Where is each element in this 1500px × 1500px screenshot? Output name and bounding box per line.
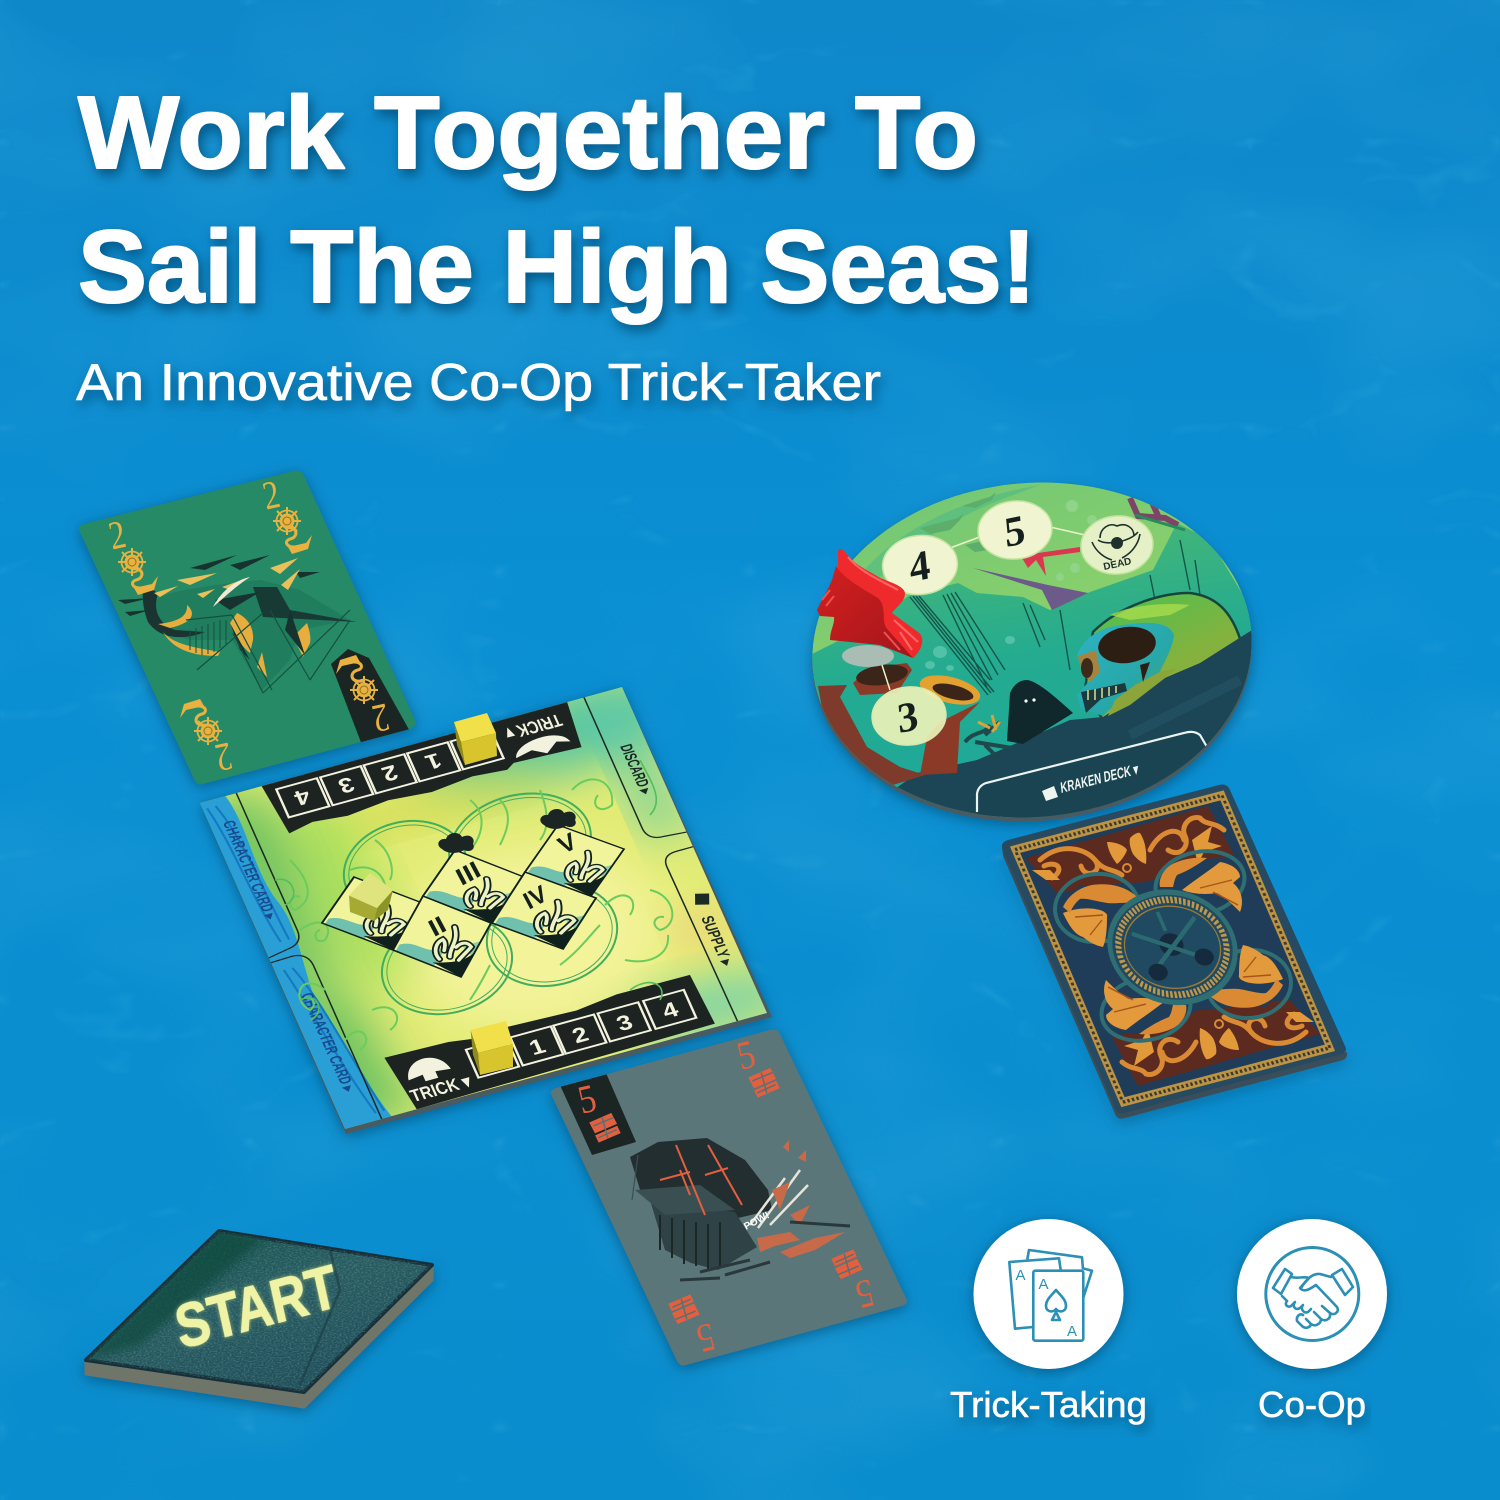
board region outlines bbox=[200, 687, 767, 1129]
board kraken grid: III bbox=[452, 856, 485, 891]
ship illustration bbox=[118, 555, 357, 693]
bottom trick strip: 1 bbox=[525, 1034, 549, 1060]
bottom trick strip: 4 bbox=[658, 998, 683, 1024]
top trick strip: 1 bbox=[421, 748, 445, 774]
number 5 and suit marks: 5 bbox=[693, 1314, 719, 1361]
bottom trick strip bbox=[384, 973, 716, 1112]
number 5 and suit marks bbox=[574, 1032, 878, 1361]
title bbox=[78, 75, 1036, 324]
side labels: CHARACTER CARD ▸ bbox=[297, 991, 359, 1095]
pots bbox=[818, 661, 983, 800]
title: Work Together To bbox=[78, 75, 978, 190]
coral bbox=[965, 715, 1012, 755]
token dark floor bbox=[898, 630, 1252, 818]
icon: playing card glyphs: A bbox=[1038, 1276, 1049, 1293]
yellow cube: top strip bbox=[454, 713, 497, 765]
shipwreck illustration: POW! bbox=[742, 1210, 771, 1233]
icon: co-op circle bbox=[1237, 1219, 1387, 1369]
bottom trick strip: 2 bbox=[569, 1022, 592, 1048]
card banner bbox=[331, 649, 412, 745]
red meeple bbox=[817, 549, 922, 667]
number 2 and suit marks: 2 bbox=[105, 512, 130, 558]
round kraken token bbox=[798, 468, 1270, 840]
number 2 and suit marks: 2 bbox=[211, 734, 236, 780]
sharks and bubbles bbox=[920, 492, 1097, 581]
bubbles lower left bbox=[925, 636, 1015, 671]
number spaces on the track: 5 bbox=[1002, 507, 1027, 557]
start token bbox=[80, 1225, 440, 1407]
decorative rings and vines on board bbox=[275, 760, 672, 1050]
shipwreck illustration bbox=[630, 1138, 850, 1280]
side labels: SUPPLY ▸ bbox=[697, 914, 737, 969]
number 5 and suit marks: 5 bbox=[733, 1032, 759, 1079]
card banner bbox=[559, 1073, 636, 1155]
board kraken grid: IV bbox=[519, 881, 552, 915]
card ornament lower half bbox=[1096, 932, 1320, 1086]
number 5 and suit marks: 5 bbox=[852, 1270, 878, 1317]
skull bbox=[1077, 623, 1178, 716]
card: grey number 5 bbox=[551, 1030, 907, 1366]
icon: trick-taking circle bbox=[974, 1219, 1124, 1369]
olive cube: on the grid bbox=[349, 873, 393, 921]
hooded ghost bbox=[1007, 680, 1073, 744]
side labels bbox=[219, 712, 746, 1095]
kraken deck box: KRAKEN DECK ▾ bbox=[1060, 761, 1139, 797]
bottom trick strip: 3 bbox=[613, 1010, 637, 1036]
token rock and water bbox=[812, 524, 1252, 818]
number 2 and suit marks bbox=[105, 472, 393, 780]
subtitle: An Innovative Co-Op Trick-Taker bbox=[76, 354, 881, 412]
bottom trick strip: TRICK ▾ bbox=[407, 1072, 475, 1106]
card ornamental border bbox=[1015, 795, 1330, 1102]
top trick strip: 3 bbox=[334, 772, 358, 798]
game board bbox=[196, 684, 776, 1142]
number 5 and suit marks: 5 bbox=[574, 1076, 600, 1123]
number spaces on the track bbox=[870, 498, 1155, 748]
icon: playing card glyphs: A bbox=[1016, 1267, 1026, 1284]
top trick strip: 2 bbox=[378, 760, 402, 786]
label: trick-taking: Trick-Taking bbox=[950, 1384, 1147, 1425]
icon: playing card glyphs bbox=[1009, 1250, 1092, 1341]
number 2 and suit marks: 2 bbox=[259, 472, 284, 518]
title: Sail The High Seas! bbox=[78, 209, 1036, 324]
board kraken grid bbox=[322, 809, 624, 977]
top trick strip: 4 bbox=[290, 784, 314, 810]
start label: START bbox=[169, 1252, 344, 1363]
card navy field bbox=[1013, 794, 1332, 1104]
number spaces on the track: 3 bbox=[895, 693, 920, 743]
card ornament upper half bbox=[1026, 806, 1250, 960]
side labels: DISCARD ▸ bbox=[616, 742, 656, 797]
board kraken grid: V bbox=[554, 828, 581, 860]
streaks bbox=[910, 540, 1200, 695]
icon: handshake bbox=[1266, 1248, 1359, 1340]
top trick strip: TRICK ▾ bbox=[501, 710, 565, 743]
number 2 and suit marks: 2 bbox=[368, 695, 393, 741]
top trick strip bbox=[262, 702, 589, 835]
yellow cube: bottom strip bbox=[471, 1021, 514, 1076]
icon: playing card glyphs: A bbox=[1067, 1323, 1077, 1340]
kraken deck box bbox=[977, 732, 1207, 830]
number spaces on the track: 4 bbox=[907, 542, 932, 592]
board kraken grid: II bbox=[424, 911, 451, 943]
label: co-op: Co-Op bbox=[1258, 1384, 1366, 1425]
token light-green water bbox=[812, 482, 1252, 818]
card: green number 2 bbox=[79, 471, 415, 784]
number spaces on the track: DEAD bbox=[1102, 556, 1132, 573]
side labels: CHARACTER CARD ▸ bbox=[219, 819, 280, 922]
storm clouds bbox=[438, 809, 576, 853]
kraken card deck back bbox=[1002, 785, 1347, 1119]
dome behind skull bbox=[1085, 593, 1242, 720]
card central medallion bbox=[1091, 879, 1254, 1016]
